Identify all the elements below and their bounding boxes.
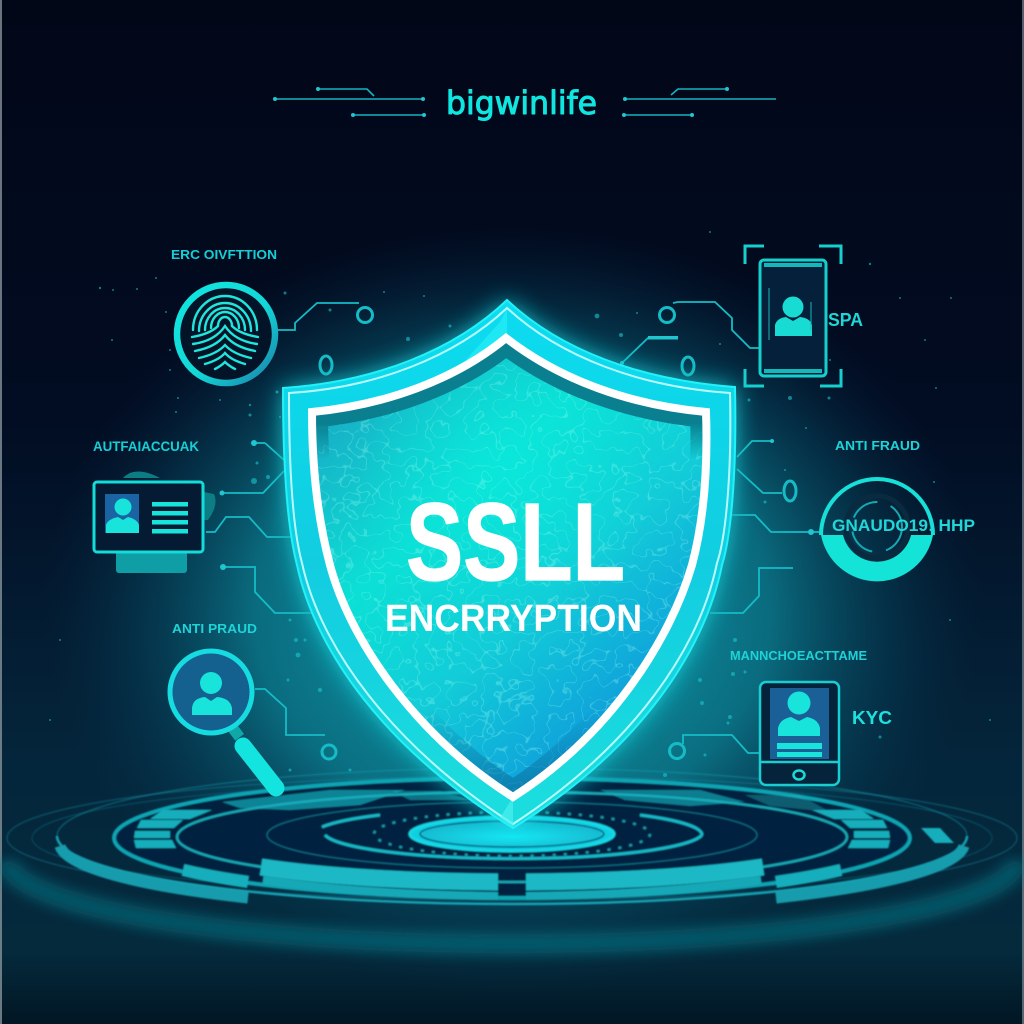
ground ring blocks	[134, 790, 954, 848]
icon: anti fraud dial	[821, 479, 933, 581]
logo wordmark: bigwinlife	[446, 84, 597, 122]
icon: magnifying glass	[170, 651, 276, 788]
particles	[49, 231, 991, 777]
label: spa: SPA	[828, 310, 863, 330]
logo circuit lines right	[622, 87, 776, 117]
label: dial text: GNAUDO19: HHP	[832, 516, 975, 535]
label: anti fraud right: ANTI FRAUD	[835, 438, 920, 453]
logo header	[273, 84, 776, 122]
label: kyc: KYC	[852, 708, 892, 728]
icon: fingerprint	[177, 285, 275, 383]
central platform disc	[410, 817, 614, 851]
shield subtitle: ENCRRYPTION	[385, 598, 642, 640]
shield white outline	[312, 338, 706, 797]
shield glow	[283, 300, 735, 828]
icon: id card	[94, 472, 216, 573]
logo circuit lines left	[273, 87, 426, 117]
icon: phone scan	[745, 246, 841, 386]
shield inner panel	[316, 343, 702, 792]
shield title: SSLL	[406, 481, 625, 604]
label: anti fraud left: ANTI PRAUD	[172, 621, 257, 636]
shield	[283, 300, 735, 828]
label: manufacture: MANNCHOEACTTAME	[730, 648, 867, 663]
circuit connectors	[206, 302, 820, 759]
label: encryption: ERC OIVFTTION	[171, 248, 277, 262]
holographic ground rings	[7, 768, 1017, 944]
icon: kyc phone	[760, 682, 839, 785]
label: authentication: AUTFAIACCUAK	[93, 439, 199, 454]
shield outer band	[283, 300, 735, 828]
